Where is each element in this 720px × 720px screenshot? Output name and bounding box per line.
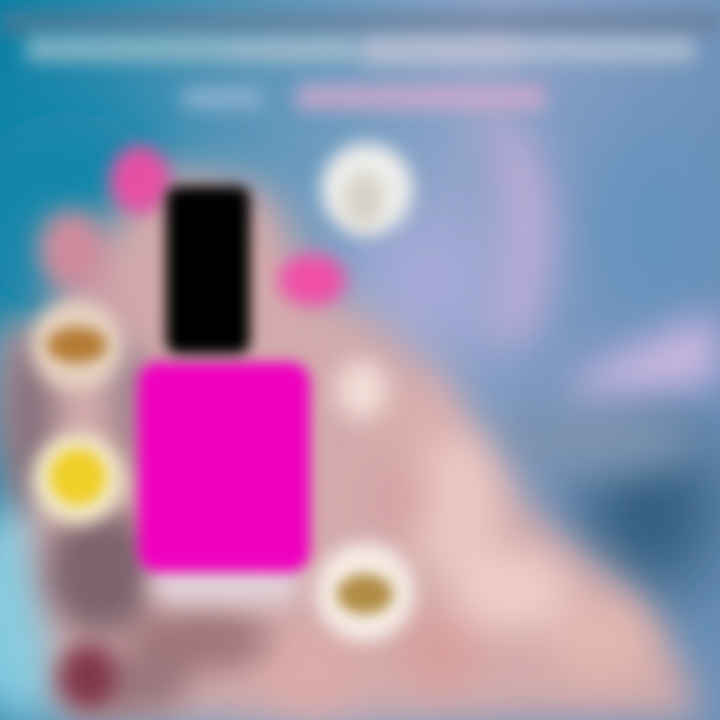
icon: amber ingredient circle: [31, 299, 123, 391]
icon: white ingredient circle: [321, 143, 413, 235]
icon: yellow ingredient circle: [32, 433, 124, 525]
palm highlights: [260, 380, 650, 710]
palm and fingers: [0, 165, 700, 720]
subtitle (illegible in reference, drawn as blurred text band): [182, 84, 546, 110]
pink nail second finger: [44, 214, 100, 286]
top header band: [0, 12, 720, 34]
title (illegible in reference, drawn as blurred text band): [26, 36, 695, 66]
icon: gold ingredient circle: [315, 542, 415, 642]
pink nail top: [110, 146, 170, 214]
knuckle highlight: [336, 360, 388, 420]
pink nail right thumb: [278, 254, 346, 306]
finger shadows: [4, 330, 270, 715]
dark red nail bottom left: [60, 644, 116, 708]
bottle shadow: [150, 560, 300, 604]
nail polish bottle: [138, 186, 310, 604]
hand: [0, 146, 700, 720]
bottle cap: [166, 186, 250, 354]
bottle body: [138, 362, 310, 572]
